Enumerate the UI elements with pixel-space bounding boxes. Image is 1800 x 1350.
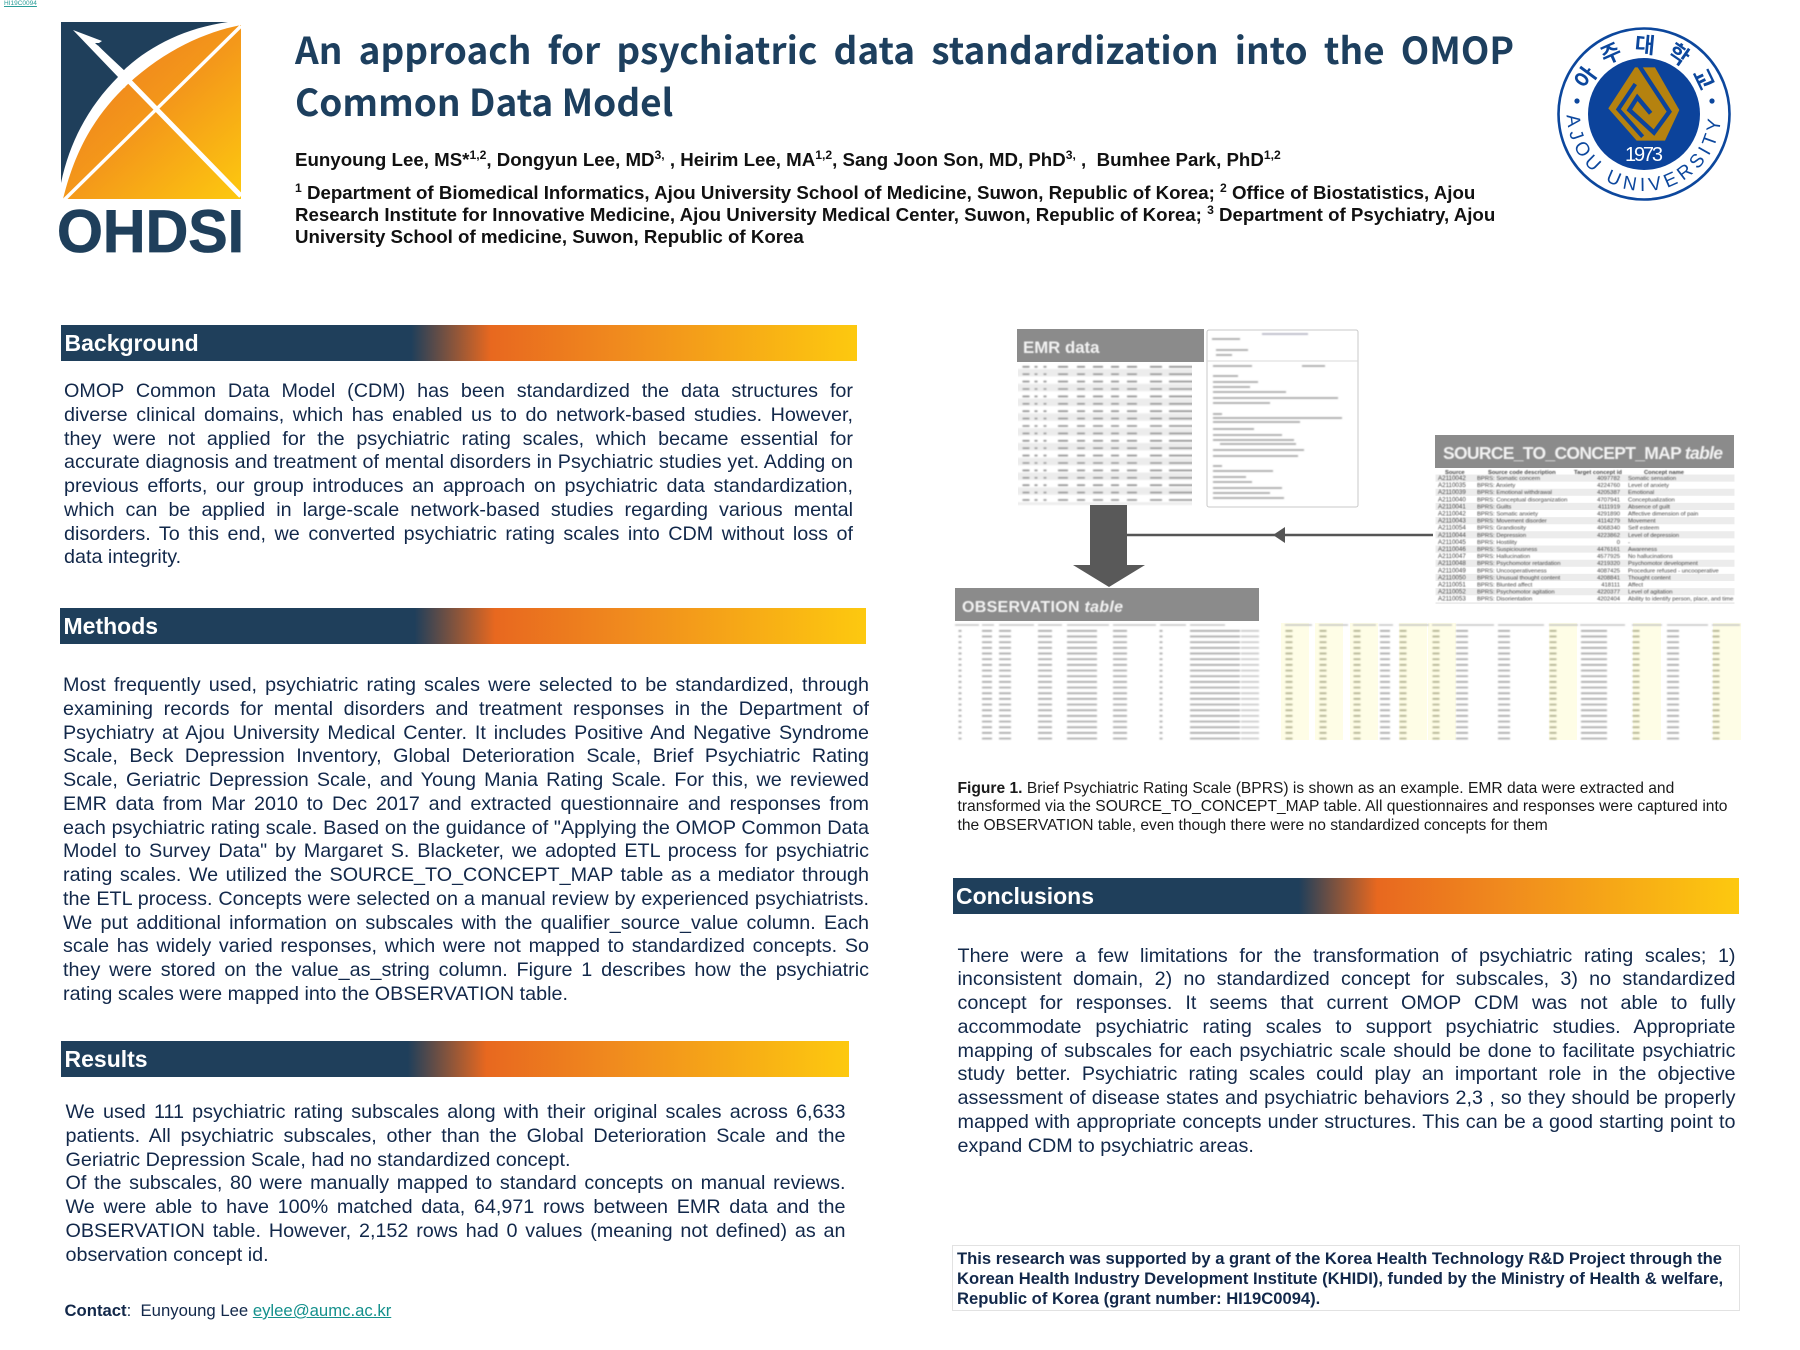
OBSERVATION table — [955, 623, 1740, 741]
affiliations: Research Institute for Innovative Medicine, Ajou University Medical Center, Suwon, Republic of Korea; 3 Department of Psychiatry, Ajou — [295, 203, 1495, 225]
SOURCE_TO_CONCEPT_MAP table: - — [1628, 540, 1630, 546]
SOURCE_TO_CONCEPT_MAP table: Concept name — [1644, 470, 1685, 476]
OBSERVATION heading — [955, 588, 1259, 621]
EMR data heading: EMR data — [1023, 338, 1100, 357]
SOURCE_TO_CONCEPT_MAP table: 4202404 — [1597, 597, 1621, 603]
SOURCE_TO_CONCEPT_MAP table: 4208841 — [1597, 575, 1620, 581]
logo: OHDSI — [57, 22, 244, 260]
SOURCE_TO_CONCEPT_MAP table: BPRS: Disorientation — [1477, 597, 1532, 603]
methods text: they were stored on the value_as_string column. Figure 1 describes how the psychiatric — [63, 959, 869, 981]
SOURCE_TO_CONCEPT_MAP table: SOURCE_TO_CONCEPT_MAP table — [1443, 443, 1723, 463]
logo: Ajou University seal: 1973 — [1625, 144, 1663, 166]
methods text — [63, 674, 869, 1005]
SOURCE_TO_CONCEPT_MAP table: A2110050 — [1438, 574, 1466, 581]
SOURCE_TO_CONCEPT_MAP table: A2110040 — [1438, 496, 1466, 503]
contact: Contact: Eunyoung Lee eylee@aumc.ac.kr — [64, 1301, 391, 1320]
EMR data table — [1026, 366, 1184, 505]
SOURCE_TO_CONCEPT_MAP table: 0 — [1617, 540, 1621, 546]
EMR questionnaire form — [1207, 330, 1358, 507]
background text: which can be applied in large-scale network-based studies regarding various mental — [64, 499, 853, 521]
SOURCE_TO_CONCEPT_MAP table: A2110051 — [1438, 582, 1466, 588]
conclusions text: expand CDM to psychiatric areas. — [958, 1135, 1254, 1157]
SOURCE_TO_CONCEPT_MAP table: A2110044 — [1438, 532, 1466, 539]
SOURCE_TO_CONCEPT_MAP table: BPRS: Hostility — [1477, 540, 1517, 546]
authors: Eunyoung Lee, MS*1,2, Dongyun Lee, MD3, , Heirim Lee, MA1,2, Sang Joon Son, MD, PhD3, , Bumhee Park, PhD1,2 — [295, 148, 1281, 170]
SOURCE_TO_CONCEPT_MAP table: Level of depression — [1628, 533, 1679, 539]
SOURCE_TO_CONCEPT_MAP table: A2110054 — [1438, 525, 1466, 532]
SOURCE_TO_CONCEPT_MAP table: BPRS: Grandiosity — [1477, 526, 1526, 532]
SOURCE_TO_CONCEPT_MAP table: 4707941 — [1597, 497, 1620, 503]
SOURCE_TO_CONCEPT_MAP table: 4476161 — [1597, 547, 1620, 553]
panel: conclusions heading: Conclusions — [956, 883, 1094, 909]
SOURCE_TO_CONCEPT_MAP table: No hallucinations — [1628, 554, 1673, 560]
SOURCE_TO_CONCEPT_MAP table: BPRS: Uncooperativeness — [1477, 568, 1547, 574]
results text: We used 111 psychiatric rating subscales along with their original scales across 6,633 — [66, 1101, 846, 1123]
figure caption: the OBSERVATION table, even though there were no standardized concepts for them — [958, 817, 1548, 834]
conclusions text: study better. Psychiatric rating scales could play an important role in the objective — [958, 1063, 1736, 1085]
panel: background heading: Background — [64, 330, 199, 356]
methods text: rating scales were mapped into the OBSERVATION table. — [63, 983, 568, 1005]
background text — [64, 380, 853, 568]
conclusions text: There were a few limitations for the transformation of psychiatric rating scales; 1) — [958, 944, 1736, 966]
methods text: examining records for mental disorders and treatment responses in the Department of — [63, 698, 869, 720]
panel: methods heading — [60, 608, 866, 644]
SOURCE_TO_CONCEPT_MAP table: A2110048 — [1438, 560, 1466, 567]
results text: We were able to have 100% matched data, 64,971 rows between EMR data and the — [66, 1196, 846, 1218]
results text: Of the subscales, 80 were manually mapped to standard concepts on manual reviews. — [66, 1172, 846, 1194]
results text: observation concept id. — [66, 1244, 269, 1266]
SOURCE_TO_CONCEPT_MAP table: Thought content — [1628, 575, 1671, 581]
results text: OBSERVATION table. However, 2,152 rows had 0 values (meaning not defined) as an — [66, 1220, 846, 1242]
SOURCE_TO_CONCEPT_MAP table: Psychomotor development — [1628, 561, 1698, 567]
conclusions text — [958, 944, 1736, 1157]
SOURCE_TO_CONCEPT_MAP table: Affective dimension of pain — [1628, 512, 1698, 518]
funding acknowledgement box: Korean Health Industry Development Institute (KHIDI), funded by the Ministry of Health & welfare, — [957, 1269, 1723, 1288]
affiliations — [295, 181, 1495, 247]
methods text: rating scales. We utilized the SOURCE_TO_CONCEPT_MAP table as a mediator through — [63, 864, 869, 886]
background text: data integrity. — [64, 546, 181, 568]
SOURCE_TO_CONCEPT_MAP table: A2110041 — [1438, 503, 1466, 510]
SOURCE_TO_CONCEPT_MAP table: BPRS: Somatic anxiety — [1477, 512, 1538, 518]
funding acknowledgement box: Republic of Korea (grant number: HI19C0094). — [957, 1289, 1320, 1308]
SOURCE_TO_CONCEPT_MAP table: BPRS: Psychomotor retardation — [1477, 561, 1560, 567]
SOURCE_TO_CONCEPT_MAP table: Level of agitation — [1628, 590, 1673, 596]
SOURCE_TO_CONCEPT_MAP table — [1435, 435, 1734, 604]
logo: Ajou University seal — [1557, 27, 1731, 201]
conclusions text: accommodate psychiatric rating scales to support psychiatric studies. Appropriate — [958, 1016, 1736, 1038]
SOURCE_TO_CONCEPT_MAP table: A2110043 — [1438, 518, 1466, 525]
SOURCE_TO_CONCEPT_MAP table: BPRS: Emotional withdrawal — [1477, 490, 1552, 496]
SOURCE_TO_CONCEPT_MAP table: Self esteem — [1628, 526, 1659, 532]
SOURCE_TO_CONCEPT_MAP table: BPRS: Movement disorder — [1477, 519, 1547, 525]
SOURCE_TO_CONCEPT_MAP table: BPRS: Unusual thought content — [1477, 575, 1561, 581]
title — [294, 21, 1514, 126]
SOURCE_TO_CONCEPT_MAP table: A2110053 — [1438, 596, 1466, 603]
methods text: Scale, Beck Depression Inventory, Global Deterioration Scale, Brief Psychiatric Rating — [63, 745, 869, 767]
panel: conclusions heading — [952, 878, 1738, 914]
SOURCE_TO_CONCEPT_MAP table: A2110052 — [1438, 589, 1466, 596]
SOURCE_TO_CONCEPT_MAP table: 4097782 — [1597, 476, 1620, 482]
SOURCE_TO_CONCEPT_MAP table: 4068340 — [1597, 526, 1621, 532]
methods text: scale has widely varied responses, which were not mapped to standardized concepts. So — [63, 935, 869, 957]
conclusions text: concept for responses. It seems that current OMOP CDM was not able to fully — [958, 992, 1736, 1014]
SOURCE_TO_CONCEPT_MAP table: Level of anxiety — [1628, 483, 1669, 489]
SOURCE_TO_CONCEPT_MAP table: 4219320 — [1597, 561, 1621, 567]
SOURCE_TO_CONCEPT_MAP table: 4291890 — [1597, 512, 1621, 518]
affiliations: University School of medicine, Suwon, Republic of Korea — [295, 226, 804, 247]
SOURCE_TO_CONCEPT_MAP table: Somatic sensation — [1628, 476, 1676, 482]
funding acknowledgement box — [952, 1245, 1740, 1311]
conclusions text: mapping of subscales for each psychiatric scale should be done to facilitate psychiatric — [958, 1040, 1736, 1062]
SOURCE_TO_CONCEPT_MAP table: BPRS: Depression — [1477, 533, 1526, 539]
figure 1: ETL flow diagram — [954, 329, 1741, 740]
background text: diverse clinical domains, which has enabled us to do network-based studies. However, — [64, 404, 853, 426]
background text: accurate diagnosis and treatment of mental disorders in Psychiatric studies yet. Adding on — [64, 451, 853, 473]
SOURCE_TO_CONCEPT_MAP table: BPRS: Blunted affect — [1477, 582, 1533, 588]
SOURCE_TO_CONCEPT_MAP table: 418111 — [1601, 582, 1620, 588]
figure caption: transformed via the SOURCE_TO_CONCEPT_MAP table. All questionnaires and responses were captured into — [958, 798, 1727, 815]
methods text: Psychiatry at Ajou University Medical Center. It includes Positive And Negative Syndrome — [63, 722, 869, 744]
SOURCE_TO_CONCEPT_MAP table: A2110039 — [1438, 489, 1466, 496]
SOURCE_TO_CONCEPT_MAP table: Procedure refused - uncooperative — [1628, 568, 1719, 574]
arrow: source map to observation — [1127, 527, 1433, 543]
results text — [66, 1101, 846, 1266]
SOURCE_TO_CONCEPT_MAP table: A2110042 — [1438, 510, 1466, 518]
SOURCE_TO_CONCEPT_MAP table: 4087425 — [1597, 568, 1621, 574]
methods text: the ETL process. Concepts were selected on a manual review by experienced psychiatrists. — [63, 888, 869, 910]
SOURCE_TO_CONCEPT_MAP table: Affect — [1628, 582, 1643, 588]
SOURCE_TO_CONCEPT_MAP table: A2110046 — [1438, 546, 1466, 553]
SOURCE_TO_CONCEPT_MAP table: A2110035 — [1438, 482, 1466, 489]
SOURCE_TO_CONCEPT_MAP table: Awareness — [1628, 547, 1657, 553]
SOURCE_TO_CONCEPT_MAP table: BPRS: Hallucination — [1477, 554, 1530, 560]
SOURCE_TO_CONCEPT_MAP table: BPRS: Guilts — [1477, 504, 1511, 510]
SOURCE_TO_CONCEPT_MAP table: BPRS: Conceptual disorganization — [1477, 497, 1567, 503]
title: Common Data Model — [295, 72, 673, 126]
panel: background heading — [61, 325, 857, 361]
conclusions text: inconsistent domain, 2) no standardized concept for subscales, 3) no standardized — [958, 968, 1736, 990]
SOURCE_TO_CONCEPT_MAP table: 4224760 — [1597, 483, 1621, 489]
SOURCE_TO_CONCEPT_MAP table: Target concept id — [1574, 470, 1622, 476]
SOURCE_TO_CONCEPT_MAP table: 4111919 — [1598, 504, 1620, 510]
methods text: Model to Survey Data" by Margaret S. Blacketer, we adopted ETL process for psychiatric — [63, 840, 869, 862]
SOURCE_TO_CONCEPT_MAP table: Movement — [1628, 519, 1656, 525]
results text: Geriatric Depression Scale, had no standardized concept. — [66, 1149, 571, 1171]
EMR data heading — [1017, 329, 1204, 362]
SOURCE_TO_CONCEPT_MAP table: BPRS: Anxiety — [1477, 483, 1515, 489]
SOURCE_TO_CONCEPT_MAP table: Conceptualization — [1628, 497, 1675, 503]
arrow: EMR data to observation — [1073, 505, 1145, 587]
SOURCE_TO_CONCEPT_MAP table: BPRS: Psychomotor agitation — [1477, 590, 1555, 596]
OBSERVATION heading: OBSERVATION table — [962, 599, 1123, 616]
background text: OMOP Common Data Model (CDM) has been standardized the data structures for — [64, 380, 853, 402]
SOURCE_TO_CONCEPT_MAP table: Source code description — [1488, 470, 1556, 476]
affiliations: 1 Department of Biomedical Informatics, Ajou University School of Medicine, Suwon, Republic of Korea; 2 Office of Biostatistics, Ajou — [295, 181, 1475, 203]
logo: Ajou University seal: 아주대학교 — [1574, 34, 1715, 91]
methods text: EMR data from Mar 2010 to Dec 2017 and extracted questionnaire and responses from — [63, 793, 869, 815]
SOURCE_TO_CONCEPT_MAP table: 4223862 — [1597, 533, 1620, 539]
panel: results heading — [61, 1041, 849, 1077]
title: An approach for psychiatric data standardization into the OMOP — [295, 21, 1514, 75]
SOURCE_TO_CONCEPT_MAP table: Ability to identify person, place, and time — [1628, 597, 1734, 603]
conclusions text: assessment of disease states and psychiatric behaviors 2,3 , so they should be properly — [958, 1087, 1736, 1109]
SOURCE_TO_CONCEPT_MAP table: BPRS: Suspiciousness — [1477, 547, 1537, 553]
background text: they were not applied for the psychiatric rating scales, which became essential for — [64, 428, 853, 450]
methods text: Scale, Geriatric Depression Scale, and Young Mania Rating Scale. For this, we reviewed — [63, 769, 869, 791]
background text: previous efforts, our group introduces an approach on psychiatric data standardization, — [64, 475, 853, 497]
SOURCE_TO_CONCEPT_MAP table: A2110047 — [1438, 553, 1466, 560]
figure caption — [958, 780, 1727, 834]
SOURCE_TO_CONCEPT_MAP table: A2110049 — [1438, 567, 1466, 574]
methods text: We put additional information on subscales with the qualifier_source_value column. Each — [63, 912, 869, 934]
SOURCE_TO_CONCEPT_MAP table: 4205387 — [1597, 490, 1620, 496]
SOURCE_TO_CONCEPT_MAP table: Absence of guilt — [1628, 504, 1670, 510]
logo: Ajou University seal: AJOU UNIVERSITY — [1566, 115, 1720, 191]
SOURCE_TO_CONCEPT_MAP table: Emotional — [1628, 490, 1654, 496]
figure caption: Figure 1. Brief Psychiatric Rating Scale (BPRS) is shown as an example. EMR data were extracted and — [958, 780, 1674, 797]
panel: methods heading: Methods — [64, 612, 158, 638]
SOURCE_TO_CONCEPT_MAP table: 4220377 — [1597, 590, 1620, 596]
SOURCE_TO_CONCEPT_MAP table: 4577925 — [1597, 554, 1621, 560]
results text: patients. All psychiatric subscales, other than the Global Deterioration Scale and the — [66, 1125, 846, 1147]
methods text: Most frequently used, psychiatric rating scales were selected to be standardized, through — [63, 674, 869, 696]
background text: disorders. To this end, we converted psychiatric rating scales into CDM without loss of — [64, 523, 853, 545]
SOURCE_TO_CONCEPT_MAP table: 4114279 — [1598, 519, 1620, 525]
SOURCE_TO_CONCEPT_MAP table: A2110042 — [1438, 475, 1466, 482]
SOURCE_TO_CONCEPT_MAP table: BPRS: Somatic concern — [1477, 476, 1540, 482]
methods text: each psychiatric rating scale. Based on the guidance of "Applying the OMOP Common Data — [63, 817, 869, 839]
SOURCE_TO_CONCEPT_MAP table: Source — [1445, 470, 1465, 476]
poster id link: HI19C0094 — [4, 0, 37, 7]
funding acknowledgement box: This research was supported by a grant of the Korea Health Technology R&D Project through the — [957, 1249, 1722, 1268]
panel: results heading: Results — [64, 1046, 148, 1072]
conclusions text: mapped with appropriate concepts under structures. This can be a good starting point to — [958, 1111, 1736, 1133]
SOURCE_TO_CONCEPT_MAP table: A2110045 — [1438, 539, 1466, 546]
